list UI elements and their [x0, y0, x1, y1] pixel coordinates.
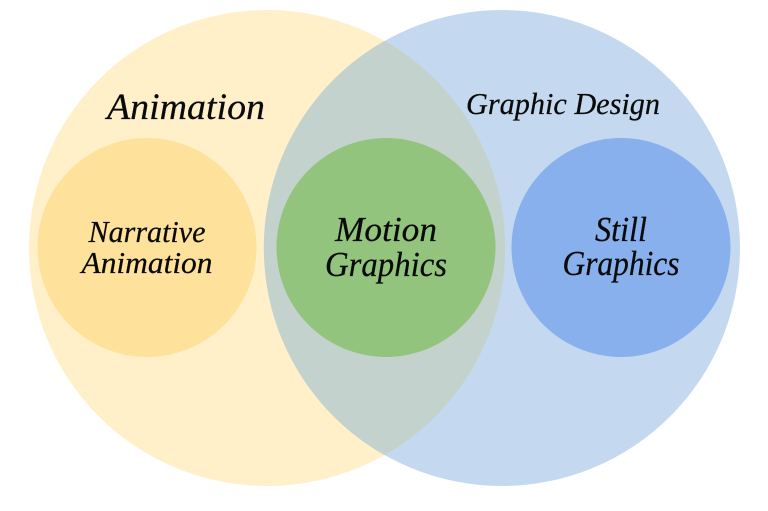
overlap region	[264, 41, 505, 455]
circle: Motion Graphics	[276, 138, 496, 357]
label: Narrative Animation: Animation	[79, 245, 212, 280]
label: Narrative Animation: Narrative	[88, 214, 206, 249]
label: Motion Graphics: Graphics	[325, 245, 447, 284]
circle: Still Graphics	[512, 138, 730, 357]
heading: Graphic Design: Graphic Design	[466, 86, 660, 121]
label: Motion Graphics: Motion	[334, 210, 437, 249]
heading: Animation: Animation	[104, 87, 265, 128]
label: Still Graphics: Still	[595, 210, 647, 249]
label: Still Graphics: Graphics	[562, 244, 680, 283]
circle: Narrative Animation	[38, 138, 256, 357]
